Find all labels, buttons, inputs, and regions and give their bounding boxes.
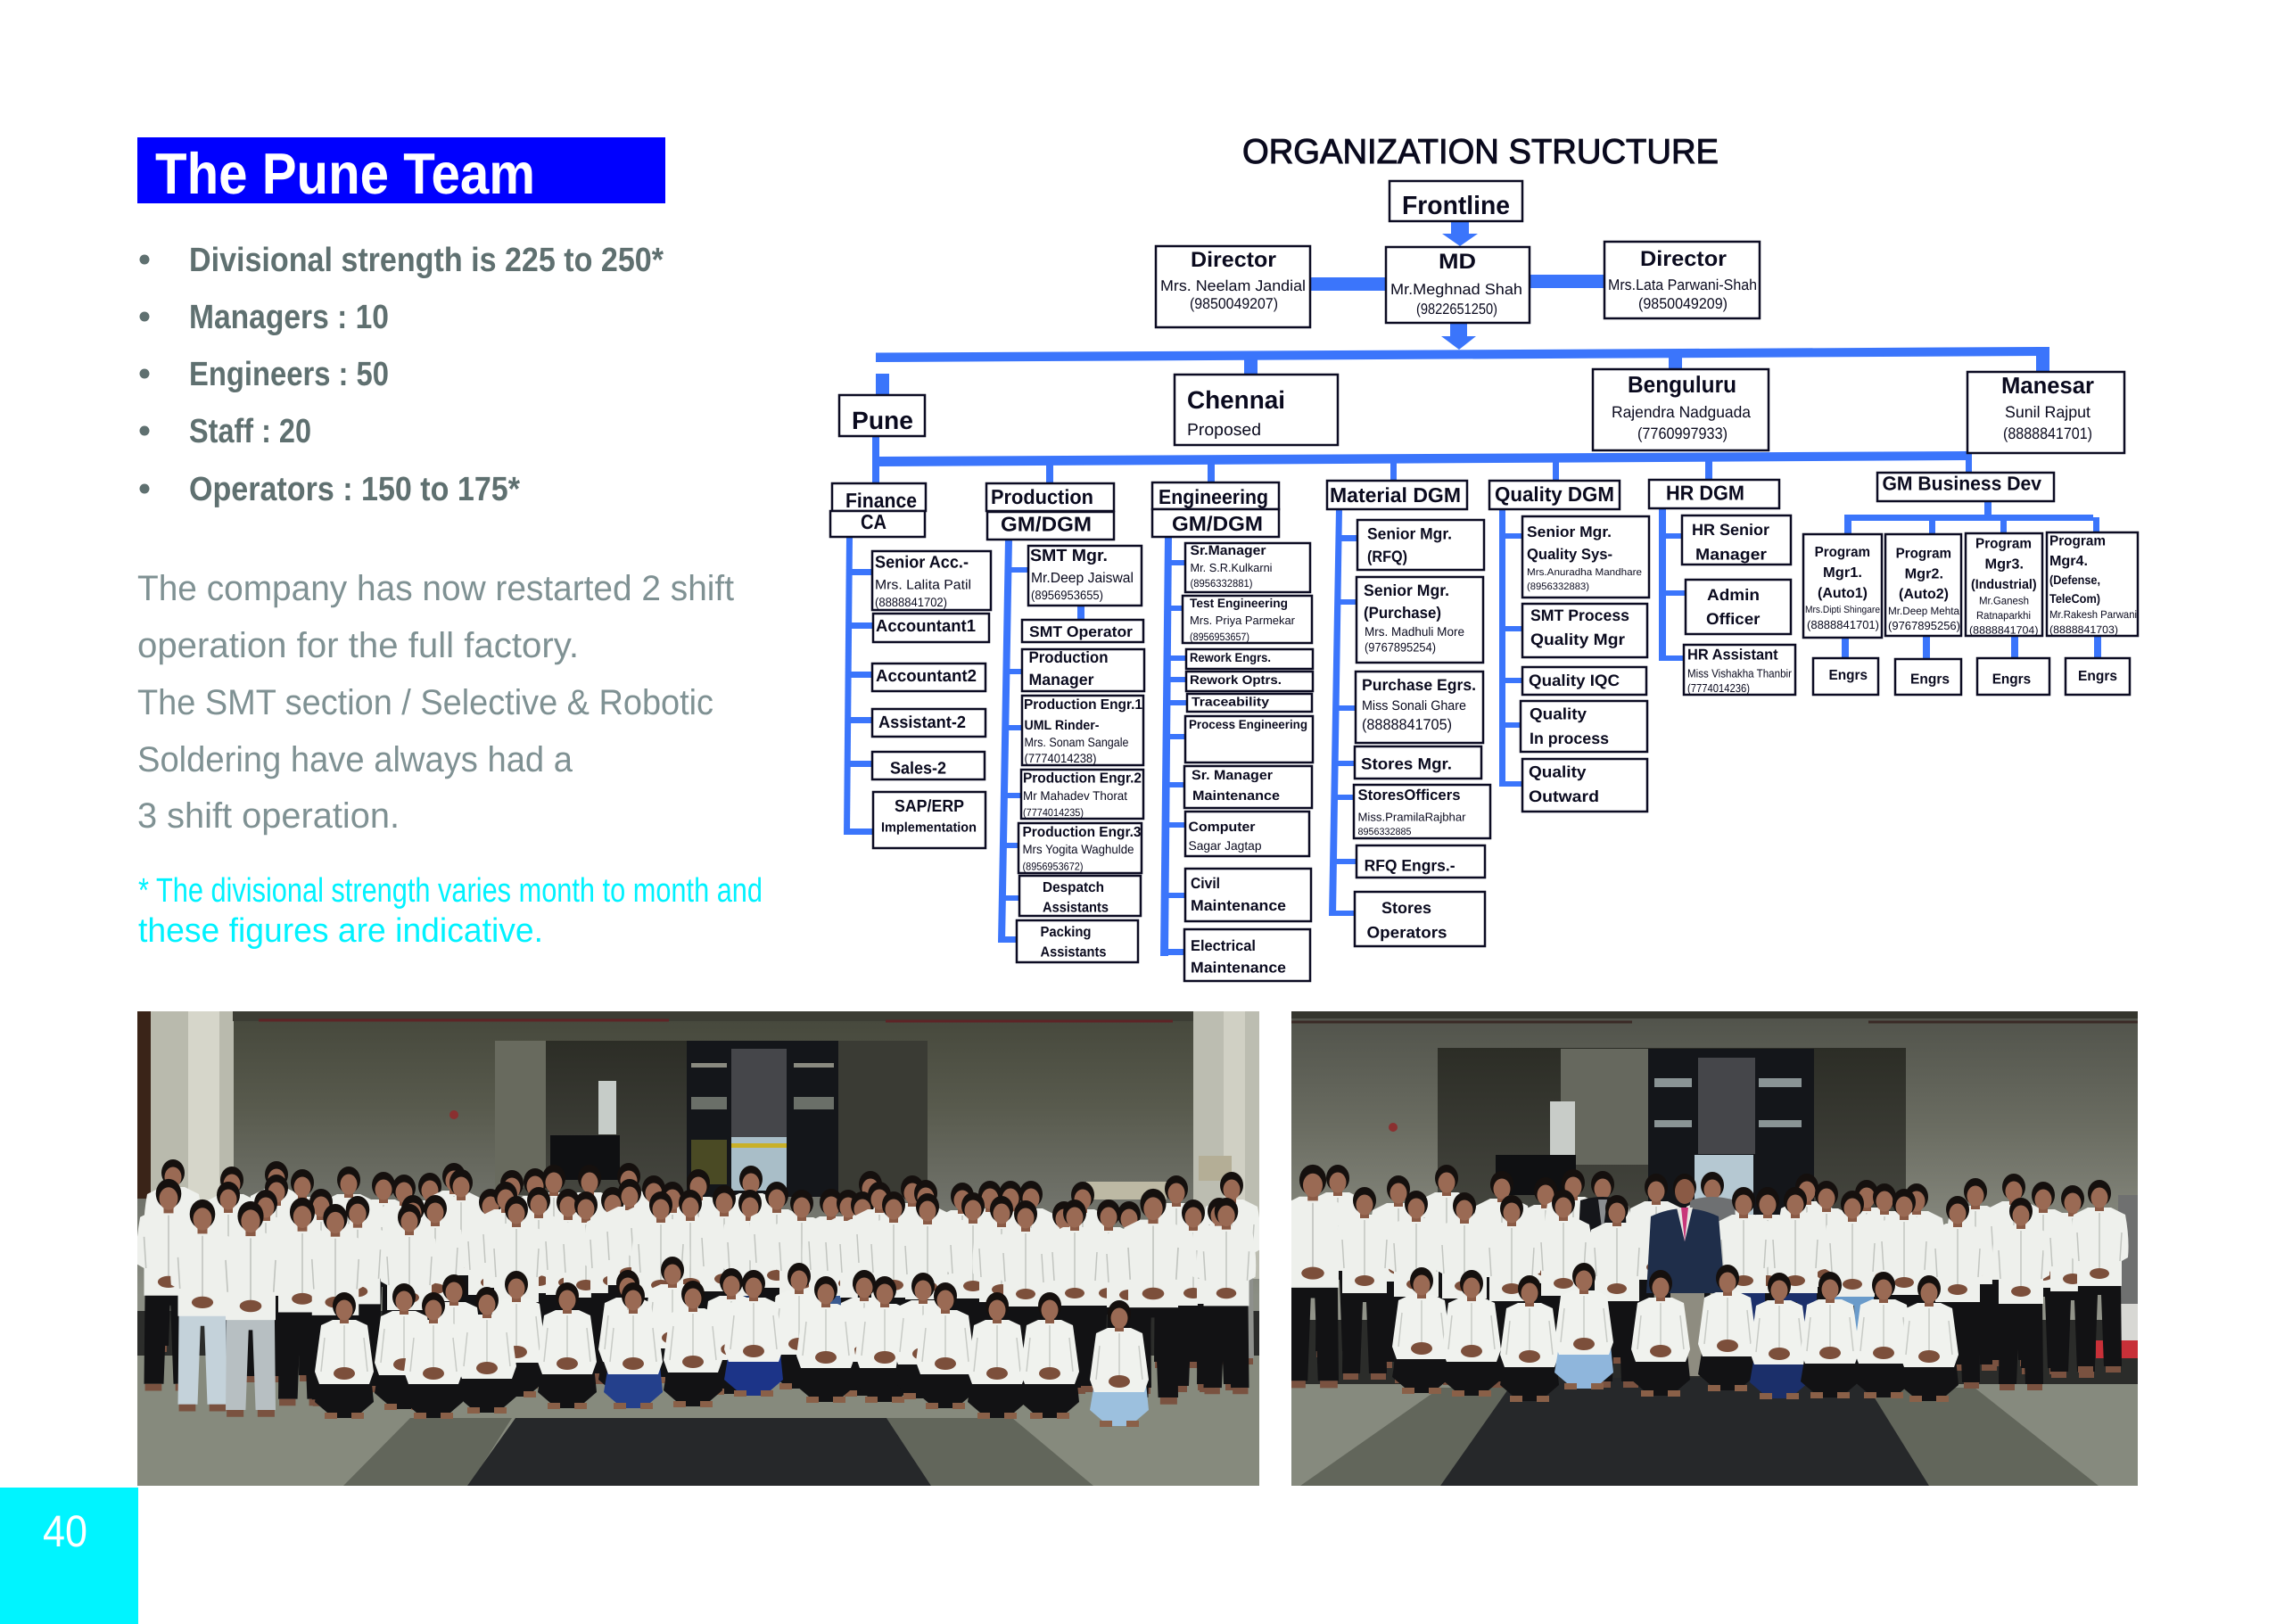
- column: GM Business Dev: Program: [2049, 534, 2106, 549]
- column: GM Business Dev: (Auto1): [1818, 586, 1868, 601]
- column: Production: Mrs Yogita Waghulde: [1022, 842, 1134, 856]
- column: Material DGM: (9767895254): [1365, 640, 1436, 655]
- column: Material DGM: StoresOfficers: [1357, 787, 1461, 804]
- column: Engineering: [1152, 482, 1313, 981]
- box: Director Neelam Jandial: Mrs. Neelam Jandial: [1160, 277, 1306, 294]
- column: HR DGM: [1649, 480, 1795, 695]
- shift operation paragraph: operation for the full factory.: [137, 626, 579, 665]
- column: GM Business Dev: Mrs.Dipti Shingare: [1805, 605, 1880, 615]
- column: Finance: SAP/ERP: [895, 797, 964, 816]
- column: GM Business Dev: Engrs: [1828, 668, 1868, 683]
- column: GM Business Dev: Mr.Ganesh: [1979, 595, 2029, 607]
- column: Material DGM: Stores: [1381, 899, 1431, 917]
- column: Quality DGM: [1489, 481, 1649, 812]
- shift operation paragraph: The SMT section / Selective & Robotic: [137, 683, 713, 722]
- box: MD: [1386, 247, 1530, 323]
- footnote: * The divisional strength varies month to month and: [138, 872, 763, 910]
- shift operation paragraph: [137, 569, 734, 836]
- column: Production: Mr Mahadev Thorat: [1023, 788, 1127, 803]
- column: Material DGM: Senior Mgr.: [1364, 581, 1449, 599]
- bullet list: team strength: Managers : 10: [189, 299, 389, 336]
- column: Production: Production: [1029, 648, 1108, 666]
- column: Engineering: Test Engineering: [1190, 596, 1288, 610]
- box: Pune: Pune: [852, 407, 913, 434]
- bullet list: team strength: Operators : 150 to 175*: [189, 471, 520, 508]
- column: Production: Production Engr.3: [1022, 825, 1142, 840]
- column: Finance: Implementation: [881, 820, 977, 835]
- box: Frontline: [1390, 181, 1522, 221]
- column: Engineering: Maintenance: [1192, 788, 1280, 804]
- column: Material DGM: Stores Mgr.: [1361, 755, 1452, 773]
- box: Chennai: [1175, 375, 1338, 445]
- column: Engineering: Traceability: [1192, 694, 1269, 708]
- column: Production: SMT Operator: [1029, 623, 1133, 640]
- box: Director Lata Parwani-Shah: [1604, 242, 1760, 318]
- box: Bengaluru: Benguluru: [1628, 371, 1736, 398]
- column: HR DGM: HR Assistant: [1687, 647, 1778, 664]
- column: Production: (8956953672): [1022, 860, 1083, 872]
- column: Production: (7774014235): [1023, 806, 1084, 819]
- column: Quality DGM: Quality DGM: [1495, 482, 1614, 506]
- photo: full Pune team group: [137, 1011, 1259, 1486]
- column: Quality DGM: SMT Process: [1530, 606, 1629, 624]
- column: GM Business Dev: Program: [1815, 545, 1870, 560]
- footnote: these figures are indicative.: [138, 912, 543, 950]
- column: Material DGM: Purchase Egrs.: [1362, 676, 1476, 694]
- front standing row: [136, 1179, 1256, 1417]
- connectors and trunks: [844, 221, 2101, 956]
- shift operation paragraph: The company has now restarted 2 shift: [137, 569, 734, 608]
- column: HR DGM: (7774014236): [1687, 681, 1750, 695]
- column: Finance: (8888841702): [875, 595, 947, 609]
- column: HR DGM: Miss Vishakha Thanbir: [1687, 667, 1793, 680]
- title bar: The Pune Team: [155, 141, 535, 206]
- column: Production: GM/DGM: [1001, 512, 1092, 535]
- bullet list: team strength: [139, 242, 664, 508]
- column: Engineering: Sagar Jagtap: [1188, 838, 1262, 853]
- column: GM Business Dev: (8888841703): [2049, 623, 2118, 636]
- column: Quality DGM: Quality: [1530, 705, 1587, 722]
- back row of staff: [144, 1159, 1261, 1375]
- column: Quality DGM: Senior Mgr.: [1527, 523, 1612, 540]
- column: Production: Assistants: [1043, 901, 1109, 915]
- column: Engineering: Process Engineering: [1189, 717, 1307, 731]
- column: GM Business Dev: Mr.Deep Mehta: [1888, 605, 1959, 617]
- column: Engineering: Mrs. Priya Parmekar: [1190, 614, 1296, 627]
- column: Engineering: (8956332881): [1190, 577, 1252, 589]
- column: Production: UML Rinder-: [1024, 718, 1100, 733]
- column: Engineering: Computer: [1188, 820, 1256, 835]
- kneeling row of staff: [315, 1257, 1149, 1427]
- column: Engineering: GM/DGM: [1172, 512, 1263, 535]
- column: Production: Mr.Deep Jaiswal: [1031, 571, 1134, 586]
- column: GM Business Dev: Mgr3.: [1985, 557, 2024, 573]
- column: GM Business Dev: Mgr4.: [2049, 554, 2088, 569]
- box: Director Neelam Jandial: (9850049207): [1190, 295, 1278, 312]
- column: Finance: Accountant2: [876, 667, 977, 686]
- box: Director Neelam Jandial: Director: [1191, 248, 1276, 272]
- box: MD: (9822651250): [1416, 301, 1497, 317]
- column: Production: Production Engr.1: [1024, 697, 1142, 713]
- column: Engineering: Civil: [1191, 875, 1220, 892]
- column: Finance: [830, 483, 991, 848]
- column: Quality DGM: Quality: [1529, 763, 1586, 781]
- organization chart: [830, 181, 2138, 981]
- column: Quality DGM: Quality Mgr: [1530, 631, 1625, 648]
- column: HR DGM: Admin: [1707, 586, 1760, 604]
- column: Engineering: Maintenance: [1191, 897, 1286, 914]
- box: Manesar: [1967, 372, 2124, 453]
- column: GM Business Dev: (Auto2): [1899, 587, 1949, 602]
- bullet list: team strength: Staff : 20: [189, 413, 311, 450]
- column: Production: Production Engr.2: [1023, 771, 1142, 787]
- column: Production: Mrs. Sonam Sangale: [1024, 735, 1129, 749]
- box: Manesar: (8888841701): [2003, 425, 2092, 442]
- column: HR DGM: Manager: [1695, 546, 1767, 564]
- box: Chennai: Chennai: [1187, 386, 1285, 414]
- column: GM Business Dev: Mgr2.: [1905, 567, 1943, 582]
- column: GM Business Dev: [1803, 473, 2138, 695]
- column: GM Business Dev: Engrs: [2078, 669, 2117, 684]
- photo: Pune management and staff group: [1291, 1011, 2138, 1486]
- column: Material DGM: (8888841705): [1362, 716, 1452, 733]
- column: Production: Packing: [1040, 925, 1092, 940]
- column: Material DGM: RFQ Engrs.-: [1365, 857, 1455, 875]
- column: Finance: Assistant-2: [878, 713, 966, 732]
- column: Material DGM: 8956332885: [1357, 827, 1411, 837]
- box: Manesar: Sunil Rajput: [2005, 403, 2090, 421]
- bullet list: team strength: Engineers : 50: [189, 356, 389, 393]
- box: Bengaluru: Rajendra Nadguada: [1612, 403, 1752, 421]
- column: GM Business Dev: Program: [1896, 547, 1951, 562]
- column: Finance: Finance: [845, 489, 917, 512]
- column: GM Business Dev: (8888841701): [1807, 618, 1879, 631]
- column: Production: Production: [991, 485, 1093, 508]
- column: Quality DGM: Quality Sys-: [1527, 546, 1612, 563]
- column: Production: Despatch: [1043, 880, 1104, 895]
- box: Manesar: Manesar: [2001, 372, 2094, 399]
- box: Bengaluru: (7760997933): [1637, 425, 1728, 442]
- column: Engineering: Rework Optrs.: [1190, 672, 1282, 687]
- column: HR DGM: HR DGM: [1666, 482, 1744, 505]
- column: Production: Assistants: [1040, 945, 1107, 960]
- bullet list: team strength: Divisional strength is 225 to 250*: [189, 242, 664, 279]
- column: GM Business Dev: Engrs: [1910, 672, 1950, 688]
- managing director in navy suit: [1646, 1174, 1725, 1376]
- box: Chennai: Proposed: [1187, 421, 1261, 440]
- footnote: [138, 872, 763, 950]
- column: GM Business Dev: (8888841704): [1969, 624, 2039, 637]
- page number tab: 40: [43, 1506, 87, 1556]
- column: Engineering: Maintenance: [1191, 960, 1286, 976]
- column: Engineering: Sr. Manager: [1192, 768, 1273, 783]
- column: Material DGM: Miss.PramilaRajbhar: [1357, 810, 1466, 824]
- box: Director Lata Parwani-Shah: Director: [1640, 247, 1727, 271]
- box: MD: MD: [1439, 250, 1476, 274]
- column: Material DGM: Operators: [1366, 924, 1447, 942]
- column: Finance: CA: [861, 510, 886, 533]
- column: Material DGM: Miss Sonali Ghare: [1362, 698, 1466, 713]
- kneeling row of staff: [1392, 1263, 1959, 1402]
- column: Quality DGM: Outward: [1529, 787, 1599, 805]
- box: Bengaluru: [1593, 369, 1769, 450]
- column: Finance: Accountant1: [876, 617, 976, 636]
- manager in grey suit: [1683, 1172, 1742, 1364]
- middle row of staff: [199, 1169, 1249, 1394]
- column: Material DGM: Material DGM: [1330, 483, 1461, 507]
- column: Production: [986, 483, 1144, 962]
- shift operation paragraph: Soldering have always had a: [137, 740, 573, 779]
- column: HR DGM: HR Senior: [1692, 521, 1769, 539]
- column: Production: (7774014238): [1024, 751, 1097, 765]
- column: HR DGM: Officer: [1706, 610, 1761, 628]
- column: GM Business Dev: GM Business Dev: [1882, 473, 2042, 495]
- column: Engineering: Mr. S.R.Kulkarni: [1190, 561, 1273, 574]
- column: GM Business Dev: (Defense,: [2049, 573, 2100, 587]
- box: MD: Mr.Meghnad Shah: [1390, 281, 1522, 298]
- column: Engineering: Rework Engrs.: [1190, 650, 1271, 664]
- back row of managers and staff: [1308, 1165, 2073, 1380]
- column: GM Business Dev: TeleCom): [2049, 591, 2100, 606]
- org chart heading: ORGANIZATION STRUCTURE: [1242, 133, 1719, 171]
- shift operation paragraph: 3 shift operation.: [137, 796, 400, 836]
- column: Engineering: Sr.Manager: [1190, 543, 1266, 558]
- column: Material DGM: Senior Mgr.: [1367, 524, 1452, 542]
- column: GM Business Dev: Mgr1.: [1823, 565, 1862, 581]
- column: GM Business Dev: Program: [1975, 537, 2032, 552]
- column: Engineering: Electrical: [1191, 937, 1256, 954]
- box: Frontline: Frontline: [1402, 192, 1510, 220]
- column: Quality DGM: Mrs.Anuradha Mandhare: [1527, 567, 1642, 578]
- box: Pune: [839, 395, 925, 436]
- column: Finance: Mrs. Lalita Patil: [875, 578, 971, 592]
- column: Engineering: (8956953657): [1190, 631, 1249, 643]
- column: Material DGM: (Purchase): [1364, 604, 1441, 622]
- column: Finance: Sales-2: [890, 760, 946, 778]
- column: Quality DGM: (8956332883): [1527, 581, 1589, 592]
- column: GM Business Dev: (Industrial): [1971, 577, 2037, 592]
- box: Director Neelam Jandial: [1156, 246, 1310, 327]
- box: Director Lata Parwani-Shah: Mrs.Lata Parwani-Shah: [1608, 276, 1757, 293]
- column: Production: Manager: [1029, 671, 1093, 688]
- column: Engineering: Engineering: [1159, 485, 1268, 508]
- box: Director Lata Parwani-Shah: (9850049209): [1638, 295, 1728, 312]
- column: Quality DGM: Quality IQC: [1529, 672, 1620, 689]
- page number tab: [0, 1488, 138, 1624]
- column: Finance: Senior Acc.-: [875, 553, 969, 573]
- column: Material DGM: Mrs. Madhuli More: [1365, 624, 1464, 639]
- column: Material DGM: (RFQ): [1367, 548, 1407, 565]
- column: Quality DGM: In process: [1530, 730, 1609, 747]
- column: GM Business Dev: Mr.Rakesh Parwani: [2049, 608, 2137, 621]
- column: GM Business Dev: Ratnaparkhi: [1976, 609, 2031, 622]
- manager in black suit: [1573, 1171, 1632, 1364]
- column: Material DGM: [1327, 481, 1490, 946]
- front standing row: [1279, 1165, 2129, 1390]
- column: Production: SMT Mgr.: [1030, 547, 1108, 565]
- column: GM Business Dev: Engrs: [1992, 672, 2031, 688]
- column: GM Business Dev: (9767895256): [1888, 619, 1960, 632]
- column: Production: (8956953655): [1031, 588, 1103, 602]
